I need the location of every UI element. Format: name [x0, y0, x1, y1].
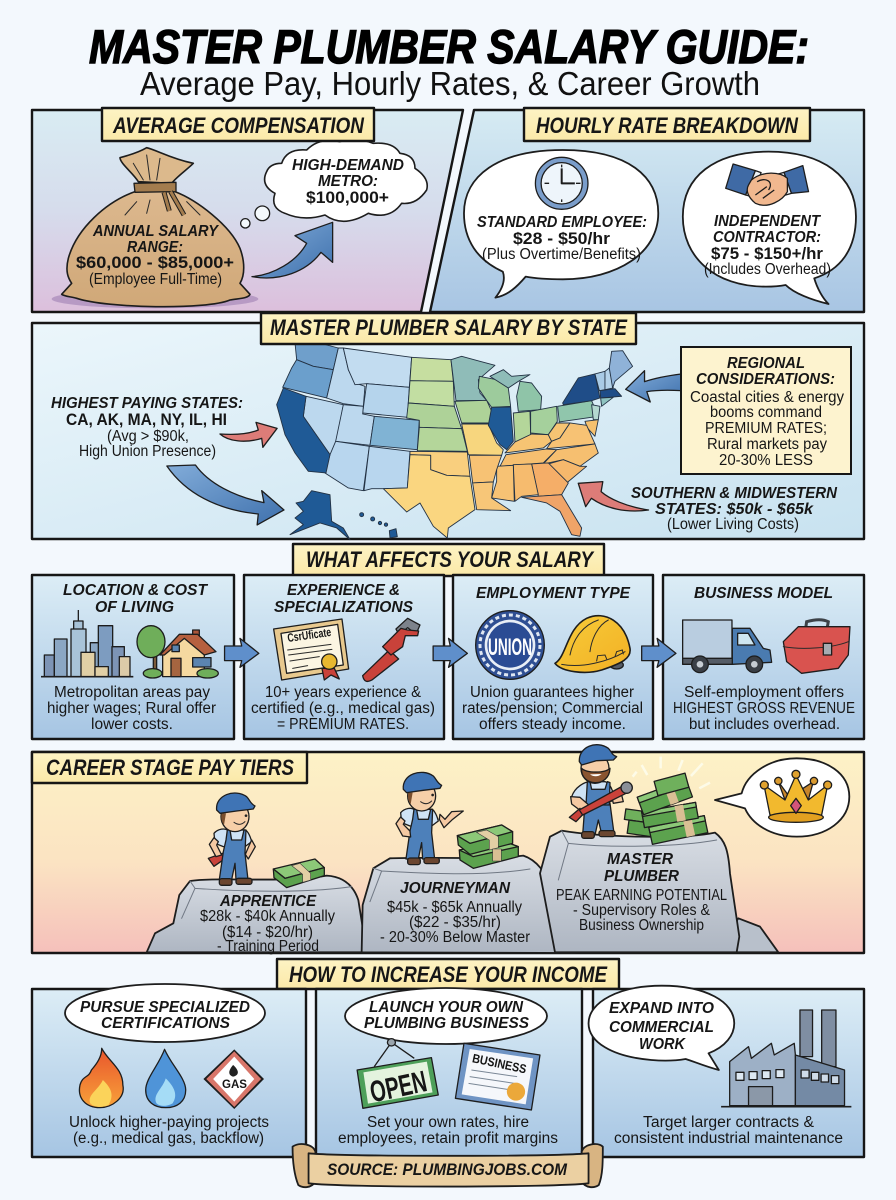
icon: truck	[683, 620, 772, 673]
icon: certificate: CsrUficate	[286, 625, 332, 645]
callout: standard employee bubble: $28 - $50/hr	[513, 230, 611, 248]
tier: apprentice: $28k - $40k Annually	[200, 908, 335, 925]
card: pursue specialized certifications: (e.g., medical gas, backflow)	[73, 1130, 264, 1147]
callout: regional considerations: REGIONAL	[727, 355, 805, 372]
icon: handshake	[726, 164, 809, 205]
text: southern and midwestern states: SOUTHERN & MIDWESTERN	[631, 485, 837, 502]
card: location and cost of living: Metropolitan areas pay	[54, 684, 210, 701]
icon: blue gas drop	[146, 1049, 186, 1108]
icon: flame	[79, 1048, 123, 1108]
tier: journeyman: JOURNEYMAN	[400, 880, 510, 897]
arrow: regional to Northeast	[626, 371, 681, 402]
callout: launch your own plumbing business	[345, 988, 547, 1044]
icon: union badge: UNION	[488, 634, 532, 661]
arrow: card 1 to card 2	[225, 638, 259, 667]
callout: independent contractor bubble: INDEPENDENT	[714, 213, 821, 230]
card: experience and specializations: 10+ years experience &	[265, 684, 422, 701]
tier: journeyman: - 20-30% Below Master	[380, 929, 530, 946]
tier: master plumber: - Supervisory Roles &	[573, 902, 711, 919]
card: pursue specialized certifications: Unlock higher-paying projects	[69, 1114, 269, 1131]
source scroll banner: SOURCE: PLUMBINGJOBS.COM	[327, 1160, 568, 1179]
card: experience and specializations: = PREMIUM RATES.	[277, 716, 409, 733]
callout: high-demand metro cloud: METRO:	[318, 173, 378, 190]
figure: apprentice plumber	[208, 793, 255, 885]
callout: standard employee bubble: STANDARD EMPLOYEE:	[477, 214, 647, 231]
callout: expand into commercial work: WORK	[639, 1036, 686, 1053]
callout: launch your own plumbing business: PLUMBING BUSINESS	[364, 1015, 529, 1032]
card: experience and specializations: SPECIALIZATIONS	[274, 599, 413, 616]
rock: apprentice	[147, 876, 367, 952]
card: launch your own plumbing business	[316, 988, 582, 1157]
text: southern and midwestern states: (Lower Living Costs)	[667, 516, 799, 533]
heading: average compensation: AVERAGE COMPENSATION	[112, 113, 365, 138]
icon: city and house	[41, 610, 218, 678]
card: experience and specializations	[244, 575, 444, 739]
text: highest paying states: HIGHEST PAYING STATES:	[51, 395, 243, 412]
callout: regional considerations	[681, 347, 851, 474]
arrow: card 3 to card 4	[642, 638, 676, 667]
heading: hourly rate breakdown: HOURLY RATE BREAKDOWN	[536, 113, 799, 138]
icon: business license: BUSINESS	[471, 1051, 528, 1076]
callout: independent contractor bubble: $75 - $150+/hr	[711, 245, 824, 263]
arrow: card 2 to card 3	[433, 638, 467, 667]
heading: hourly rate breakdown	[524, 108, 810, 141]
heading: how to increase your income: HOW TO INCREASE YOUR INCOME	[289, 962, 608, 987]
icon: money stack small	[273, 859, 324, 888]
heading: what affects your salary	[293, 544, 604, 576]
callout: independent contractor bubble: (Includes Overhead)	[704, 261, 831, 278]
card: location and cost of living: lower costs.	[91, 716, 173, 733]
figure: master plumber with wrench	[569, 745, 632, 838]
card: launch your own plumbing business: employees, retain profit margins	[338, 1130, 558, 1147]
callout: regional considerations: PREMIUM RATES;	[705, 420, 827, 437]
card: expand into commercial work: consistent industrial maintenance	[614, 1130, 843, 1147]
text: highest paying states	[51, 395, 243, 460]
callout: expand into commercial work: EXPAND INTO	[609, 1000, 715, 1017]
icon: open sign	[357, 1039, 438, 1109]
icon: certificate	[274, 619, 349, 680]
icon: factory	[721, 1010, 851, 1107]
card: location and cost of living	[32, 575, 234, 739]
callout: crown bubble	[715, 758, 849, 837]
arrow: growth	[252, 222, 333, 278]
icon: gas hazard sign	[203, 1049, 264, 1109]
text: annual salary range: RANGE:	[127, 239, 183, 256]
card: launch your own plumbing business: Set your own rates, hire	[367, 1114, 529, 1131]
text: annual salary range: ANNUAL SALARY	[92, 223, 219, 240]
card: employment type: offers steady income.	[479, 716, 626, 733]
text: southern and midwestern states	[631, 485, 837, 533]
subtitle: Average Pay, Hourly Rates, & Career Growth	[140, 65, 760, 102]
chart: US map by salary	[277, 340, 633, 540]
icon: money stack medium	[457, 825, 518, 868]
callout: independent contractor bubble	[683, 152, 856, 304]
card: employment type: Union guarantees higher	[470, 684, 634, 701]
text: highest paying states: High Union Presence)	[79, 443, 216, 460]
callout: regional considerations: CONSIDERATIONS:	[696, 371, 835, 388]
icon: crown	[760, 770, 832, 822]
icon: business license	[455, 1043, 540, 1110]
arrow: southern to Southeast	[578, 482, 649, 511]
card: location and cost of living: higher wages; Rural offer	[47, 700, 216, 717]
tier: journeyman: ($22 - $35/hr)	[409, 914, 501, 931]
heading: career stage pay tiers: CAREER STAGE PAY TIERS	[46, 755, 294, 780]
card: employment type	[453, 575, 653, 739]
callout: pursue specialized certifications: CERTIFICATIONS	[101, 1015, 230, 1032]
callout: high-demand metro cloud	[241, 140, 427, 228]
tier: master plumber: Business Ownership	[579, 917, 704, 934]
card: experience and specializations: certified (e.g., medical gas)	[251, 700, 435, 717]
icon: pipe wrench	[363, 618, 420, 681]
callout: independent contractor bubble: CONTRACTOR:	[713, 229, 821, 246]
tier: master plumber	[540, 745, 778, 952]
callout: pursue specialized certifications	[65, 984, 265, 1042]
icon: clock	[535, 157, 588, 209]
tier: master plumber: PEAK EARNING POTENTIAL	[556, 887, 727, 904]
card: expand into commercial work: Target larger contracts &	[643, 1114, 815, 1131]
arrow: highest paying to California	[220, 422, 277, 447]
card: location and cost of living: LOCATION & COST	[63, 582, 208, 599]
icon: money stack large	[624, 773, 708, 844]
icon: money bag	[52, 148, 258, 308]
card: employment type: EMPLOYMENT TYPE	[476, 585, 631, 602]
callout: high-demand metro cloud: $100,000+	[306, 189, 389, 207]
text: southern and midwestern states: STATES: $50k - $65k	[655, 501, 814, 518]
tier: apprentice: APPRENTICE	[219, 893, 317, 910]
tier: journeyman: $45k - $65k Annually	[387, 899, 522, 916]
arrow: highest paying to Alaska	[167, 465, 284, 525]
tier: master plumber: PLUMBER	[604, 868, 679, 885]
card: employment type: rates/pension; Commercial	[462, 700, 643, 717]
card: experience and specializations: EXPERIENCE &	[287, 582, 400, 599]
panel: career stage pay tiers	[32, 745, 864, 955]
callout: standard employee bubble: (Plus Overtime/Benefits)	[482, 246, 641, 263]
callout: regional considerations: booms command	[710, 404, 822, 421]
tier: apprentice	[147, 793, 367, 955]
panel: what affects your salary	[32, 544, 864, 739]
card: pursue specialized certifications	[32, 984, 306, 1157]
tier: journeyman	[362, 772, 575, 953]
text: highest paying states: CA, AK, MA, NY, IL, HI	[66, 411, 227, 429]
callout: expand into commercial work	[589, 986, 734, 1070]
callout: regional considerations: Rural markets pay	[707, 436, 827, 453]
callout: high-demand metro cloud: HIGH-DEMAND	[292, 157, 404, 174]
panel: how to increase your income	[32, 959, 864, 1157]
text: annual salary range: (Employee Full-Time)	[89, 271, 222, 288]
rock: journeyman	[362, 856, 575, 953]
card: business model	[663, 575, 864, 739]
callout: regional considerations: Coastal cities & energy	[690, 389, 844, 406]
panel: salary by state	[32, 323, 864, 540]
callout: regional considerations: 20-30% LESS	[719, 452, 813, 469]
tier: apprentice: - Training Period	[217, 938, 319, 955]
figure: journeyman plumber	[396, 772, 463, 865]
icon: open sign: OPEN	[367, 1065, 430, 1109]
heading: average compensation	[102, 108, 374, 141]
card: business model: HIGHEST GROSS REVENUE	[673, 700, 855, 717]
text: annual salary range: $60,000 - $85,000+	[76, 254, 234, 272]
decoration: sparkle rays	[633, 757, 710, 788]
callout: pursue specialized certifications: PURSUE SPECIALIZED	[80, 999, 250, 1016]
source scroll banner	[293, 1144, 603, 1187]
tier: master plumber: MASTER	[607, 851, 673, 868]
title: MASTER PLUMBER SALARY GUIDE:	[89, 20, 809, 73]
tier: apprentice: ($14 - $20/hr)	[222, 924, 313, 941]
card: expand into commercial work	[589, 986, 864, 1157]
card: location and cost of living: OF LIVING	[95, 599, 174, 616]
rock: master	[540, 831, 778, 952]
text: highest paying states: (Avg > $90k,	[107, 428, 189, 445]
card: business model: but includes overhead.	[689, 716, 840, 733]
heading: what affects your salary: WHAT AFFECTS YOUR SALARY	[306, 547, 595, 572]
panel: average compensation	[32, 110, 463, 312]
icon: toolbox	[783, 620, 850, 673]
callout: standard employee bubble	[464, 150, 658, 298]
text: annual salary range	[76, 223, 234, 288]
callout: expand into commercial work: COMMERCIAL	[609, 1019, 714, 1036]
card: business model: Self-employment offers	[684, 684, 844, 701]
icon: hard hat	[555, 616, 630, 672]
panel: hourly rate breakdown	[430, 110, 864, 312]
card: business model: BUSINESS MODEL	[694, 585, 833, 602]
icon: union badge	[476, 611, 544, 679]
callout: launch your own plumbing business: LAUNCH YOUR OWN	[369, 999, 523, 1016]
icon: gas hazard sign: GAS	[222, 1077, 247, 1091]
heading: salary by state: MASTER PLUMBER SALARY BY STATE	[270, 315, 628, 340]
